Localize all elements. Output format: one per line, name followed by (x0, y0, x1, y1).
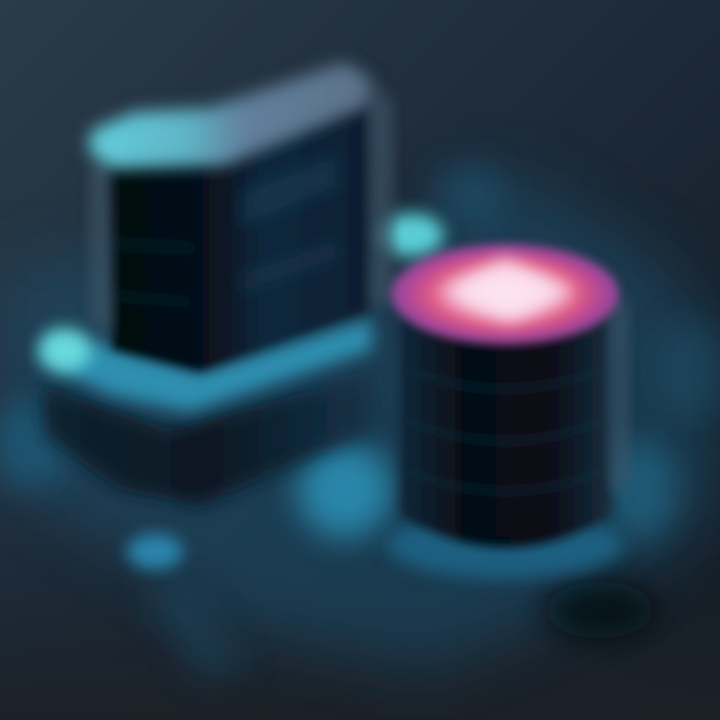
platform top (40, 318, 372, 412)
cylinder body (400, 305, 612, 548)
teal glow behind cylinder (380, 213, 444, 257)
cylinder highlight (440, 258, 575, 322)
right cylinder (387, 244, 628, 579)
server top (88, 62, 372, 168)
cylinder glow base (387, 511, 623, 579)
server face bands (112, 150, 340, 306)
server left edge (90, 165, 112, 340)
platform highlight (39, 328, 91, 372)
server body (108, 105, 372, 372)
platform body (42, 375, 375, 505)
cylinder top (391, 244, 619, 344)
floor glow (0, 165, 720, 680)
platform (39, 318, 375, 505)
server right edge (370, 85, 392, 312)
left server (88, 62, 392, 372)
cylinder right edge (610, 300, 628, 490)
cylinder bands (405, 368, 605, 491)
floor shadow (545, 582, 655, 638)
foreground objects (39, 62, 628, 579)
